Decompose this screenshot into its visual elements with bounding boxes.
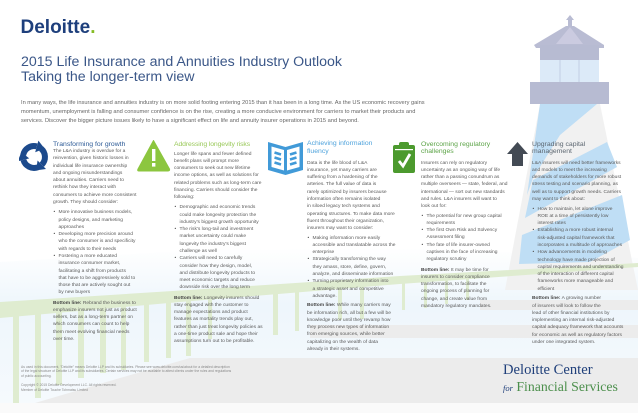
bullets: capital: efficient [538,287,554,292]
text: data intro: information often remains isolated [307,197,380,202]
text: data intro: rarely optimized by insurers because [307,190,387,195]
text: longevity intro: related problems such as long-term care [174,181,262,186]
text: longevity intro [174,152,262,200]
bottom line: capital: capital adequacy framework that accounts [532,325,623,330]
bottom line: longevity: a one-time product sale and hope their [174,332,258,337]
bullets: regulatory [422,214,502,262]
panel: transforming for growth [53,140,137,342]
heading: achieving information fluency [307,140,372,155]
text: longevity intro: Longer life spans and fewer defined [174,152,252,157]
bottom line: data [307,302,391,352]
intro text: In many ways, the life insurance and annuities industry is on more solid footing entering 2015 than it has been in a long time. As the US economic recovery gains [21,100,425,106]
footer legal text: Copyright © 2015 Deloitte Development LLC. All rights reserved. [21,383,116,387]
bottom line: regulatory [421,268,491,309]
intro text [21,100,425,124]
bullets: transforming: by new buyers [58,290,90,295]
text: capital intro: may want to think about: [532,197,585,202]
bottom line: regulatory: change, and create value from [421,297,487,302]
bottom line: data: Bottom line: While many carriers may [307,303,391,308]
bottom line: data: they process new types of information [307,325,389,330]
bullets: capital: of the interaction of different capital [538,272,614,277]
bottom line: longevity: features as mortality trends play out, [174,317,253,322]
bullets: transforming: More innovative business models, [58,210,132,215]
bottom line: capital: for economic as well as regulatory factors [532,333,622,338]
bullets: regulatory: Assessment filing [426,235,465,240]
bottom line: longevity: Bottom line: Longevity insurers should [174,296,259,301]
text: regulatory intro: Insurers can rely on regulatory [421,161,487,166]
bottom line: data: from emerging sources, while better [307,332,385,337]
bullets: longevity: market uncertainty could make [180,234,246,239]
bottom line: regulatory: insurers to consider compliance [421,275,490,280]
bullets: data: Turning proprietary information into [312,279,388,284]
title: 2015 Life Insurance and Annuities Industry Outlook [21,54,342,70]
text: regulatory intro: look out for: [421,204,447,209]
intro text: services. Discover the bigger picture issues likely to have a significant effect on life and annuity insurer operations in 2015 and beyond. [21,118,359,124]
bullets: capital [532,206,624,292]
bullets: longevity: could make longevity protection the [180,213,256,218]
bullets: transforming: facilitating a shift from products [58,269,126,274]
bottom line: capital: Bottom line: A growing number [532,296,601,301]
bullets: data [308,236,396,299]
bottom line: transforming: them meet evolving financial needs [53,330,129,335]
icon: recycling arrows [19,140,48,171]
icon: clipboard with check [393,142,415,173]
bullets: regulatory: regulatory scrutiny [426,257,466,262]
bullets: data: Making information more easily [312,236,380,241]
text: capital intro: L&A insurers will need better frameworks [532,161,621,166]
bullets: capital: interest rates [538,221,566,226]
bottom line: transforming [53,300,137,342]
bottom line: longevity: assumptions turn out to be profitable. [174,339,254,344]
text: data intro [307,160,395,231]
heading: achieving information fluency: fluency [307,148,329,155]
bullets: data: they amass, store, define, govern, [312,265,386,270]
bullets: capital: capital requirements and understanding [538,265,623,270]
text: transforming intro: growth. They should consider: [53,200,118,205]
bullets: longevity: industry's biggest growth opportunity [180,220,259,225]
bottom line: transforming: Bottom line: Rebrand the business to [53,301,136,306]
text: regulatory intro: uncertainty as an ongoing way of life [421,168,500,173]
text: longevity intro: financing. Carriers should consider the [174,188,257,193]
bottom line: capital: implementing an internal risk-adjusted [532,318,614,323]
bullets: regulatory: The potential for new group capital [426,214,502,219]
footer brand: Deloitte Center for Financial Services: for Financial Services [503,378,618,394]
bullets: capital: How advancements in modeling [538,250,607,255]
bullets: longevity: and distribute longevity products to [180,271,255,276]
text: transforming intro: about annuities. Carriers need to [53,178,124,183]
bullets: longevity: meet economic targets and reduce [180,278,255,283]
bullets: data: analyze, and disseminate information [312,272,393,277]
bullets: transforming: with regards to their needs [58,247,116,252]
text: data intro: suffering from a hardening of the [307,175,378,180]
bullets: data: a strategic asset and competitive [312,287,384,292]
bullets: capital: frameworks more manageable and [538,279,613,284]
bullets: data: accessible and translatable across the [312,243,395,248]
bottom line: transforming: over time. [53,337,74,342]
bottom line: transforming: sellers, but as a long-term partner on [53,315,133,320]
bullets: data: Strategically transforming the way [312,257,386,262]
panel: overcoming regulatory challenges [421,141,508,309]
text: regulatory intro: and rules. L&A insurers will want to [421,197,497,202]
bottom line: regulatory: Bottom line: It may be time for [421,268,489,273]
bottom line: longevity: stay engaged with the customer to [174,303,248,308]
bottom line: regulatory: transformation, to facilitate the [421,282,487,287]
bottom line: longevity: rather than just treat longevity policies as [174,325,263,330]
heading: overcoming regulatory challenges [421,141,490,155]
footer legal text: of the legal structure of Deloitte LLP and its subsidiaries. Certain services may not be available to attest clients under the rules and regulations [21,369,231,373]
bullets: regulatory: requirements [426,221,455,226]
bottom line: data: capitalizing on the wealth of data [307,340,378,345]
footer legal text: Member of Deloitte Touche Tohmatsu Limited [21,388,88,392]
bullets: transforming: approaches [58,225,84,230]
bullets: transforming: that have to be aggressively sold to [58,276,135,281]
footer legal text: As used in this document, "Deloitte" means Deloitte LLP and its subsidiaries. Please see www.deloitte.com/us/about for a detailed description [21,364,230,368]
text: longevity intro: following: [174,195,194,200]
heading: overcoming regulatory challenges: challenges [421,148,454,155]
text: data intro: operating structures. To make data more [307,212,395,217]
text: data intro: insurance, yet many carriers are [307,168,377,173]
bullets: transforming: who the consumer is and specificity [58,239,135,244]
bullets: regulatory: The fate of life insurer-owned [426,243,490,248]
bottom line: capital: of insurers will look to follow the [532,304,601,309]
bottom line: capital: under one integrated system. [532,340,595,345]
title [21,54,342,85]
text: transforming intro: rethink how they interact with [53,185,116,190]
bullets: longevity: challenge as well [180,249,217,254]
bottom line: capital: lead of other financial institutions by [532,311,609,316]
bottom line: transforming: emphasize insurers not just as product [53,308,137,313]
text: capital intro: and models to meet the increasing [532,168,607,173]
bullets: transforming: those that are actively sought out [58,283,130,288]
bullets: data: advantage. [312,294,337,299]
text: capital intro [532,160,622,202]
text: capital intro: well as to support growth needs. Carriers [532,190,621,195]
text: regulatory intro: international — sort out new standards [421,190,505,195]
text: regulatory intro: multiple overseers — state, federal, and [421,182,507,187]
text: transforming intro: consumers to achieve more consistent [53,193,136,198]
heading: achieving information fluency: Achieving information [307,140,372,147]
bottom line: regulatory: mandatory regulatory mandates. [421,304,491,309]
bullets: transforming: Fostering a more educated [58,254,117,259]
bullets: transforming: insurance consumer market, [58,261,120,266]
icon: open book [268,142,303,175]
text: regulatory intro: rather than a passing conundrum as [421,175,499,180]
heading: overcoming regulatory challenges: Overcoming regulatory [421,141,490,148]
bullets: transforming: Developing more precision around [58,232,133,237]
text: data intro: arteries. The full value of data is [307,182,376,187]
bullets: longevity: downside risk over the long term [180,285,250,290]
heading: transforming for growth: Transforming for growth [53,140,125,148]
icon: warning triangle [137,140,170,172]
bullets: longevity: longevity the industry's biggest [180,242,246,247]
text: data intro: fluent throughout their organization, [307,219,384,224]
bullets: data: enterprise [312,250,334,255]
bullets: transforming [54,210,136,295]
bullets: longevity: Carriers will need to carefully [180,256,242,261]
text: data intro: Data is the life blood of L&A [307,161,367,166]
heading: upgrading capital management [532,141,585,155]
panel: achieving information fluency [307,140,396,352]
bullets: capital: How to maintain, let alone improve [538,207,613,212]
text: data intro: in siloed legacy tech systems and [307,204,380,209]
text: transforming intro [53,148,136,205]
bullets: regulatory: The first Own Risk and Solvency [426,228,497,233]
bottom line: capital [532,296,624,345]
icon: up arrow [507,142,528,166]
bottom line: longevity: manage expectations and product [174,310,248,315]
bullets: longevity [174,204,259,290]
text: longevity intro: benefit plans will prompt more [174,159,239,164]
heading: addressing longevity risks: Addressing longevity risks [174,140,250,148]
bullets: longevity: consider how they design, model, [180,264,252,269]
text: data intro: insurers may want to consider: [307,226,373,231]
text: longevity intro: income options, as well as solutions for [174,173,259,178]
text: transforming intro: The L&A industry is overdue for a [53,149,125,154]
heading: upgrading capital management: Upgrading capital [532,141,585,148]
bullets: capital: technology have made projection of [538,258,615,263]
intro text: momentum, unemployment is falling and consumer confidence is on the rise, creating a more conducive environment for carriers to market their products and [21,109,415,115]
bottom line: longevity [174,296,263,344]
bullets: capital: incorporates a multitude of approaches [538,243,622,248]
heading: upgrading capital management: management [532,148,572,155]
footer legal text [21,364,231,392]
bullets: capital: Establishing a more robust internal [538,228,613,233]
bullets: longevity: Demographic and economic trends [180,205,255,210]
footer brand: Deloitte Center for Financial Services [503,362,618,394]
bottom line: transforming: which consumers can count to help [53,322,129,327]
text: regulatory intro [421,160,508,209]
text: transforming intro: individual life insurance ownership [53,164,127,169]
text: capital intro: demands of stakeholders for more robust [532,175,621,180]
bottom line: data: knowledge poor until they revamp how [307,318,390,323]
bullets: longevity: The risk's long-tail and investment [180,227,253,232]
panel: addressing longevity risks [174,140,263,344]
text: transforming intro: reinvention, given historic losses in [53,156,129,161]
text: capital intro: stress testing and scenario planning, as [532,182,618,187]
bottom line: regulatory: ongoing process of planning for [421,289,489,294]
bullets: regulatory: captives in the face of increasing [426,250,497,255]
text: longevity intro: consumers to seek out new lifetime [174,166,250,171]
panel: upgrading capital management [532,141,624,345]
logo: Deloitte: Deloitte. [20,17,95,38]
bullets: capital: ROE at a time of persistently low [538,214,608,219]
bullets: capital: risk-adjusted capital framework that [538,236,614,241]
title: Taking the longer-term view [21,69,194,85]
footer legal text: of public accounting. [21,374,52,378]
footer brand: Deloitte Center for Financial Services: Deloitte Center [503,362,593,378]
text: transforming intro: and ongoing misunderstandings [53,171,122,176]
bullets: transforming: policy designs, and marketing [58,218,123,223]
bottom line: data: be information rich, all but a few will be [307,311,391,316]
bottom line: data: already in their systems. [307,347,360,352]
